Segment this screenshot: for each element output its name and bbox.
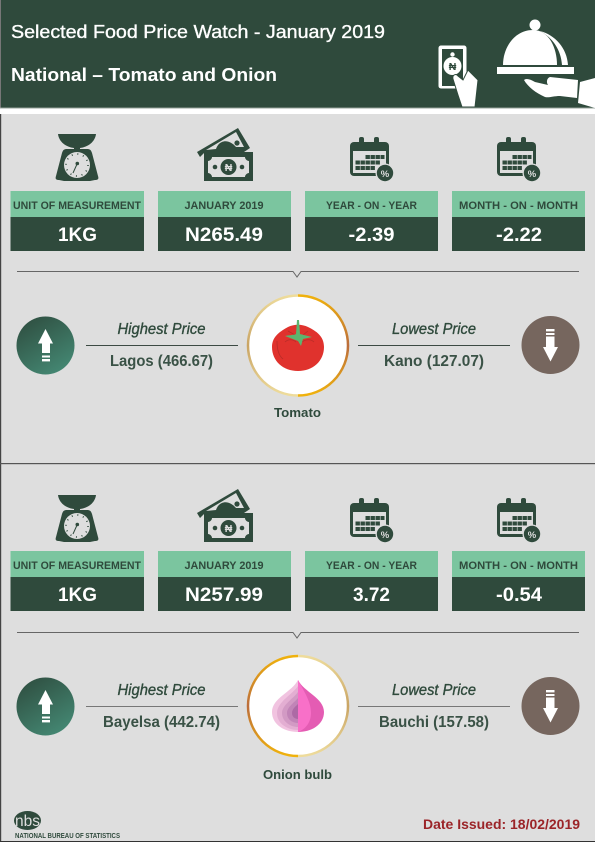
lowest price block bbox=[358, 682, 510, 731]
highest price block: Lagos (466.67) bbox=[110, 353, 213, 370]
label: tomato: Tomato bbox=[274, 405, 321, 420]
icon: hand holding naira phone: ₦ bbox=[449, 61, 457, 73]
stat: january 2019 price bbox=[158, 191, 291, 251]
stat: unit of measurement bbox=[10, 191, 144, 251]
icon: weighing scale bbox=[56, 134, 98, 181]
icon: naira banknotes: ₦ bbox=[225, 523, 233, 535]
label: onion bulb: Onion bulb bbox=[263, 767, 332, 782]
icon: down arrow badge bbox=[522, 316, 580, 374]
stat: year on year: -2.39 bbox=[348, 225, 394, 246]
stat: month on month bbox=[452, 191, 585, 251]
divider with notch bbox=[17, 272, 579, 277]
stat: month on month: -0.54 bbox=[496, 585, 542, 606]
stat: unit of measurement bbox=[10, 551, 144, 611]
highest price block: Highest Price bbox=[118, 682, 206, 699]
icon: tomato medallion bbox=[248, 296, 348, 396]
icon: calendar percent year bbox=[350, 137, 394, 182]
stat: january 2019 price: N265.49 bbox=[185, 225, 263, 246]
logo: national bureau of statistics bbox=[14, 811, 120, 840]
icon: calendar percent month bbox=[497, 137, 542, 182]
section separator bbox=[0, 463, 595, 464]
divider with notch bbox=[17, 632, 579, 638]
icon: naira banknotes bbox=[197, 489, 253, 542]
stat: year on year: YEAR - ON - YEAR bbox=[326, 560, 417, 572]
icon: naira banknotes: ₦ bbox=[225, 162, 233, 174]
icon: calendar percent year: % bbox=[381, 169, 390, 180]
icon: calendar percent month: % bbox=[528, 169, 537, 180]
icon: weighing scale bbox=[56, 495, 98, 542]
lowest price block: Lowest Price bbox=[392, 321, 476, 338]
icon: down arrow badge bbox=[522, 677, 580, 735]
highest price block: Highest Price bbox=[118, 321, 206, 338]
stat: month on month: MONTH - ON - MONTH bbox=[459, 200, 578, 212]
date issued: Date Issued: 18/02/2019 bbox=[423, 817, 580, 832]
icon: calendar percent year bbox=[350, 498, 394, 544]
icon: calendar percent month bbox=[497, 498, 542, 544]
highest price block bbox=[86, 682, 238, 731]
highest price block: Bayelsa (442.74) bbox=[103, 714, 220, 731]
panel: onion bbox=[10, 489, 585, 782]
logo: national bureau of statistics: NATIONAL BUREAU OF STATISTICS bbox=[15, 833, 120, 840]
stat: unit of measurement: 1KG bbox=[58, 225, 97, 246]
stat: january 2019 price bbox=[158, 551, 291, 611]
icon: onion medallion bbox=[248, 656, 348, 756]
icon: cloche on serving hand bbox=[497, 20, 595, 108]
icon: hand holding naira phone bbox=[438, 46, 478, 107]
stat: unit of measurement: UNIT OF MEASUREMENT bbox=[13, 560, 141, 572]
lowest price block bbox=[358, 321, 510, 370]
icon: calendar percent year: % bbox=[381, 530, 390, 541]
stat: month on month: -2.22 bbox=[496, 225, 542, 246]
icon: calendar percent month: % bbox=[528, 530, 537, 541]
stat: january 2019 price: JANUARY 2019 bbox=[184, 200, 264, 212]
icon: up arrow badge bbox=[16, 316, 74, 374]
lowest price block: Lowest Price bbox=[392, 682, 476, 699]
logo: national bureau of statistics: nbs bbox=[15, 813, 40, 830]
header banner bbox=[0, 0, 595, 114]
icon: naira banknotes bbox=[197, 128, 253, 181]
title: Selected Food Price Watch - January 2019 bbox=[11, 21, 385, 42]
stat: january 2019 price: N257.99 bbox=[185, 585, 263, 606]
lowest price block: Kano (127.07) bbox=[384, 353, 484, 370]
stat: unit of measurement: UNIT OF MEASUREMENT bbox=[13, 200, 141, 212]
stat: year on year: 3.72 bbox=[353, 585, 390, 606]
stat: january 2019 price: JANUARY 2019 bbox=[184, 560, 264, 572]
stat: month on month: MONTH - ON - MONTH bbox=[459, 560, 578, 572]
lowest price block: Bauchi (157.58) bbox=[379, 714, 489, 731]
panel: tomato bbox=[10, 128, 585, 420]
subtitle: National – Tomato and Onion bbox=[11, 64, 277, 85]
highest price block bbox=[86, 321, 238, 370]
icon: up arrow badge bbox=[16, 678, 74, 736]
stat: year on year bbox=[305, 191, 438, 251]
stat: month on month bbox=[452, 551, 585, 611]
stat: year on year: YEAR - ON - YEAR bbox=[326, 200, 417, 212]
stat: unit of measurement: 1KG bbox=[58, 585, 97, 606]
stat: year on year bbox=[305, 551, 438, 611]
